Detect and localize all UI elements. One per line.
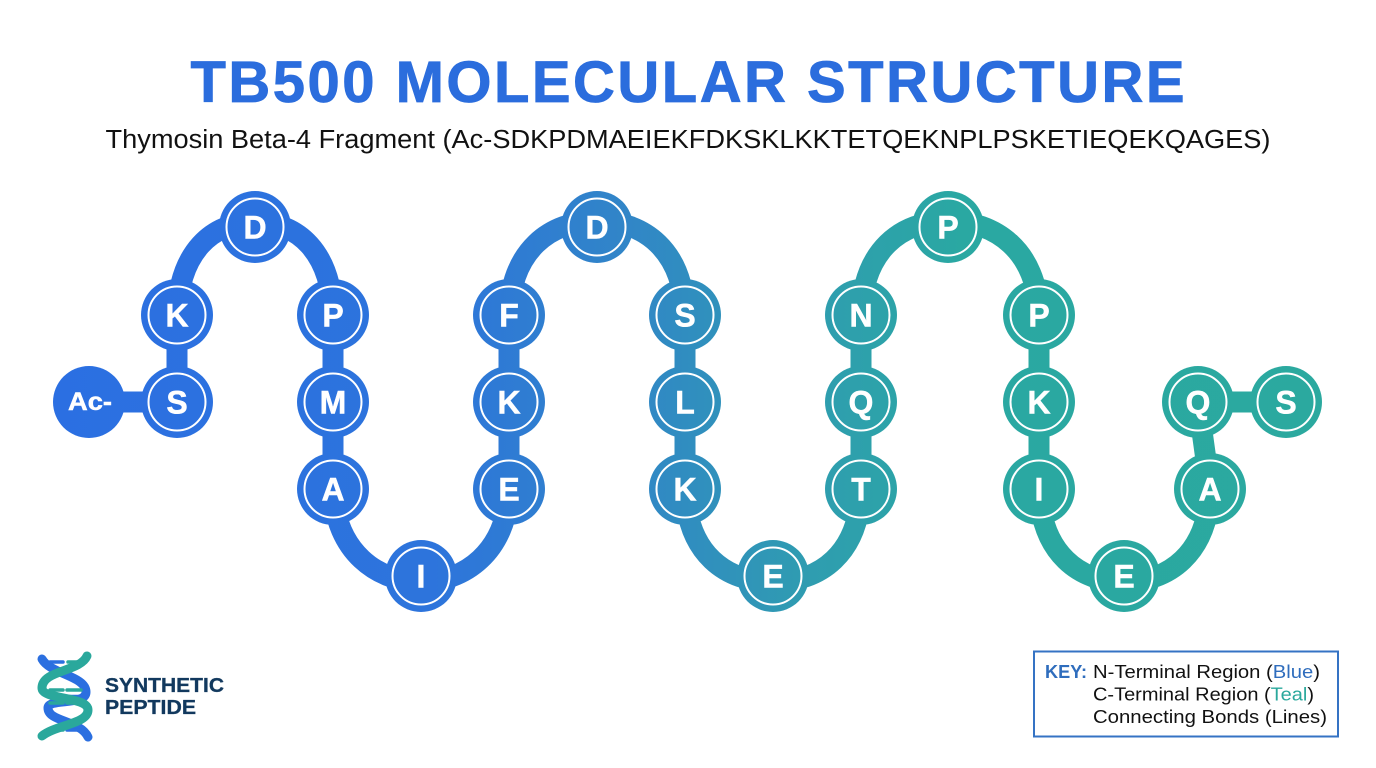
residue: Q: Q [1186,384,1210,420]
residue: I: I [1035,472,1043,508]
residue: F [473,279,545,351]
residue: A: A [321,472,345,508]
residue: M: M [320,384,346,420]
subtitle: Thymosin Beta-4 Fragment (Ac-SDKPDMAEIEKFDKSKLKKTETQEKNPLPSKETIEQEKQAGES) [106,126,1270,154]
cap: Ac- [53,366,125,438]
residue: S: S [1275,384,1297,420]
legend row: N-terminal: N-Terminal Region ( Blue) [1093,661,1320,682]
residue: T [825,453,897,525]
peptide chain diagram [53,191,1322,612]
cap: Ac-: Ac- [68,388,112,416]
legend row: bonds: Connecting Bonds (Lines) [1093,706,1327,727]
legend heading: KEY: [1045,661,1087,682]
residue: Q [825,366,897,438]
residue: S: S [674,298,696,334]
residue: T: T [851,472,871,508]
residue: A: A [1198,472,1222,508]
key legend [1034,652,1338,736]
legend row: C-terminal: C-Terminal Region ( Teal) [1093,684,1314,704]
residue: L: L [675,384,695,420]
residue: S [649,279,721,351]
logo: synthetic peptide [42,656,224,737]
residue: Q: Q [849,384,873,420]
residue: P: P [322,298,344,334]
residue: E [473,453,545,525]
logo text: PEPTIDE [105,697,196,719]
residue: K [473,366,545,438]
residue: K [141,279,213,351]
residue: P: P [1028,298,1050,334]
residue: P [912,191,984,263]
residue: E [737,540,809,612]
legend border [1034,652,1338,736]
residue: E: E [1113,558,1135,594]
residue: K: K [673,472,697,508]
residue: D: D [243,210,267,246]
residue: D: D [585,210,609,246]
residue: E [1088,540,1160,612]
residue: K: K [497,384,521,420]
residue: E: E [498,472,520,508]
residue: S [1250,366,1322,438]
residue: M [297,366,369,438]
residue: E: E [762,558,784,594]
residue: P [297,279,369,351]
residue: K [649,453,721,525]
logo text: SYNTHETIC [105,675,224,697]
residue: F: F [499,298,519,334]
residue: S [141,366,213,438]
residue: A [297,453,369,525]
residue: S: S [166,384,188,420]
residue: Q [1162,366,1234,438]
residue: D [219,191,291,263]
residue: N [825,279,897,351]
residue: K [1003,366,1075,438]
connecting bonds [89,221,1286,582]
icon: DNA helix [42,656,88,737]
residue: I: I [417,558,425,594]
residue: I [385,540,457,612]
residue: P [1003,279,1075,351]
residue: K: K [1027,384,1051,420]
title: TB500 MOLECULAR STRUCTURE [190,50,1184,115]
residue: I [1003,453,1075,525]
residue: D [561,191,633,263]
residue: A [1174,453,1246,525]
residue: K: K [165,298,189,334]
residue: N: N [849,298,873,334]
residue: L [649,366,721,438]
residue: P: P [937,210,959,246]
